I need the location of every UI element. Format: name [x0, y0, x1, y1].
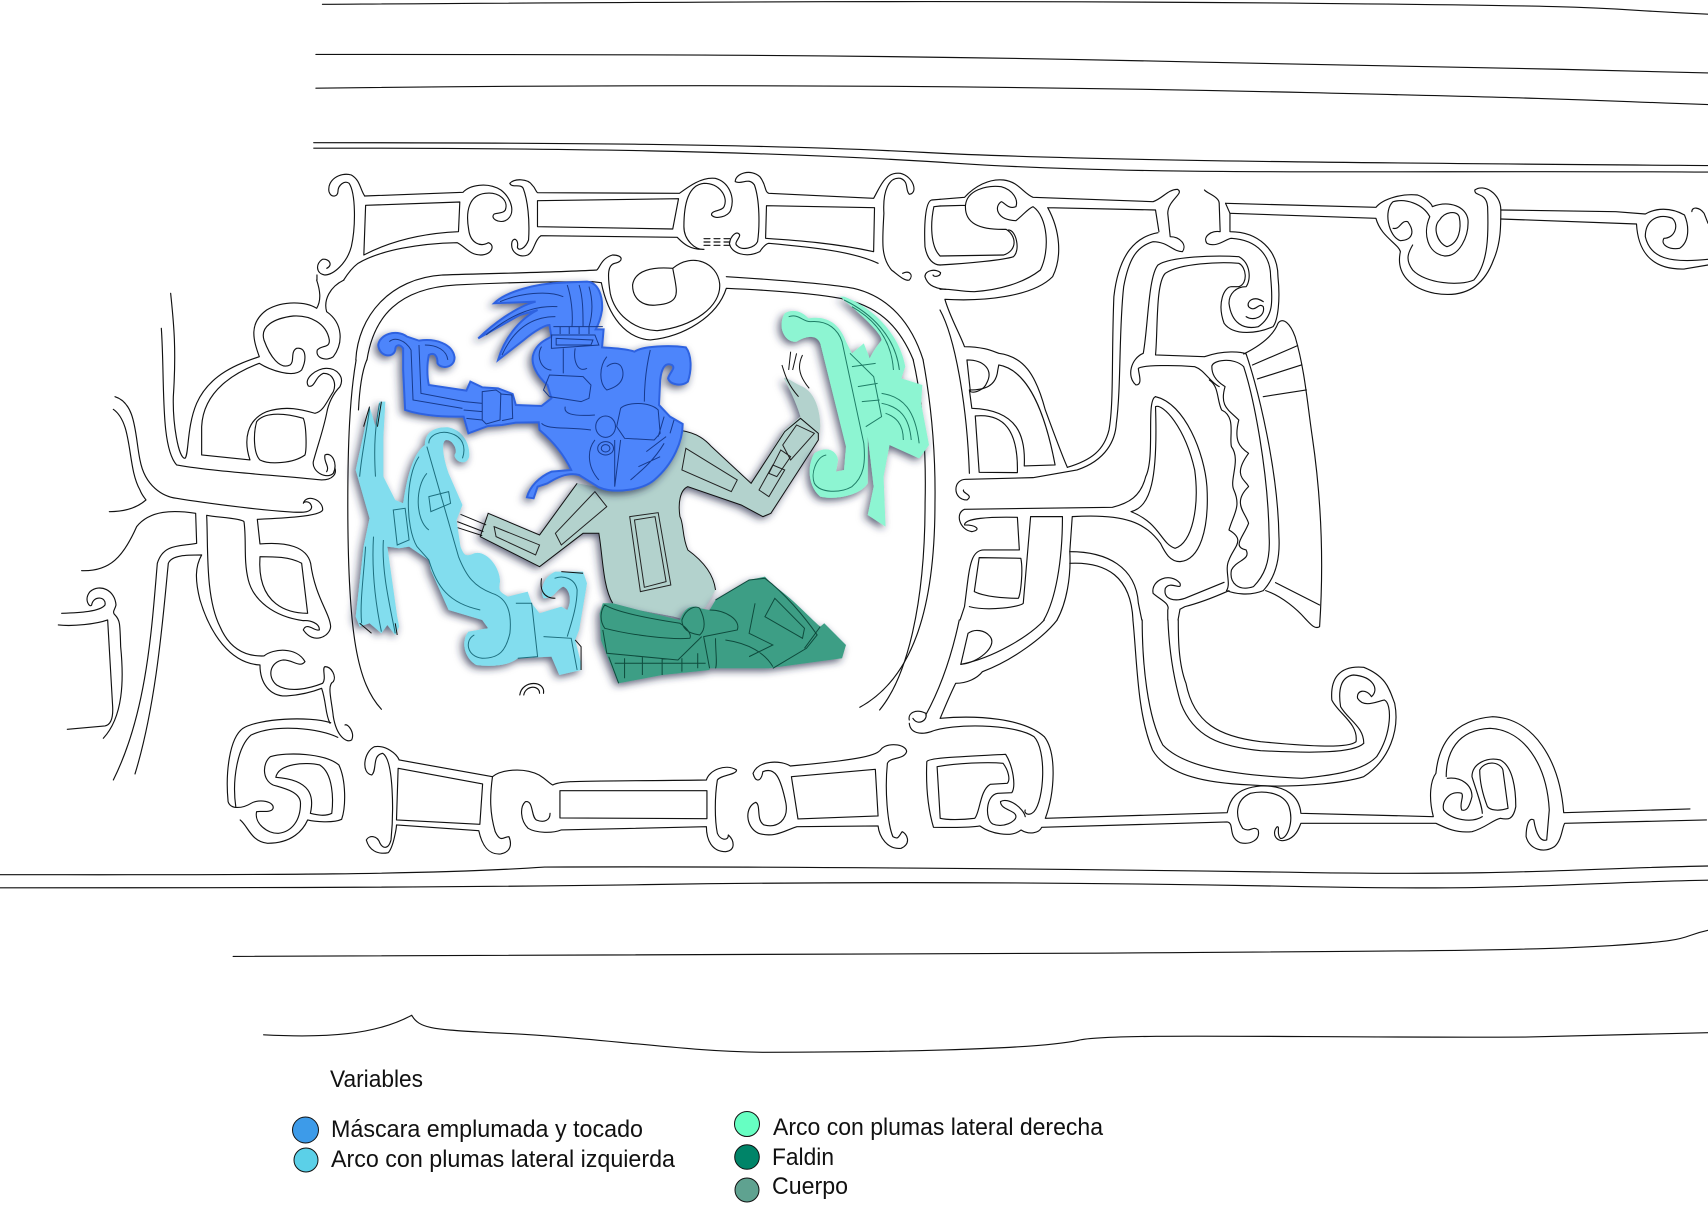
legend item: arco derecha: Arco con plumas lateral derecha [773, 1114, 1104, 1141]
central niche frame sides [348, 360, 935, 710]
legend item: faldin [735, 1144, 834, 1171]
legend item: cuerpo [735, 1173, 848, 1202]
bottom frame scrolls and cartouches [227, 719, 908, 854]
lower carved band lines [0, 866, 1708, 1052]
variable: mascara emplumada y tocado [378, 282, 691, 498]
legend item: arco izquierda: Arco con plumas lateral izquierda [331, 1146, 676, 1173]
legend item: mascara: Máscara emplumada y tocado [331, 1116, 643, 1143]
lower right scroll ornaments [909, 620, 1706, 850]
variable: faldin (kilt) [600, 577, 846, 683]
legend item: faldin: Faldin [772, 1144, 834, 1171]
left side ornaments [58, 280, 353, 780]
right side ornaments and vessel [940, 180, 1708, 628]
legend [292, 1066, 1104, 1202]
variable: cuerpo (body) [457, 352, 820, 620]
figure: deity coloured by variable [356, 282, 929, 683]
legend heading: Variables [330, 1066, 423, 1093]
variable: arco con plumas lateral derecha [782, 297, 929, 527]
legend item: cuerpo: Cuerpo [772, 1173, 848, 1200]
variable: arco con plumas lateral izquierda [356, 402, 587, 675]
upper carved band lines [314, 2, 1708, 172]
top frame scrolls and cartouches [317, 172, 946, 360]
